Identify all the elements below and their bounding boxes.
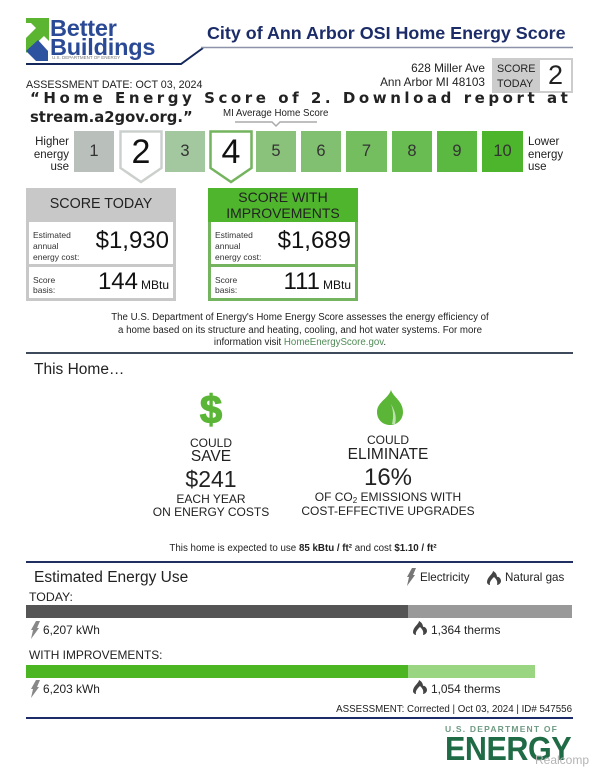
marker: score today 2 <box>119 130 163 184</box>
score 10 <box>482 131 523 172</box>
description text <box>111 312 489 348</box>
score 5: 5 <box>271 142 281 160</box>
energy wordmark: ENERGY <box>445 730 571 767</box>
badge value <box>540 60 571 91</box>
score 8 <box>392 131 432 172</box>
score 3 <box>165 131 205 172</box>
score 6: 6 <box>316 142 326 160</box>
logo: Better Buildings <box>26 15 155 61</box>
basis row <box>215 268 351 295</box>
lower energy use <box>528 136 564 173</box>
department line: U.S. DEPARTMENT OF <box>445 724 558 734</box>
address: 628 Miller Ave <box>411 61 485 75</box>
score 1: 1 <box>89 142 99 160</box>
score today badge <box>492 58 573 93</box>
panel heading: SCORE TODAY <box>50 196 152 212</box>
today electricity value <box>31 621 100 639</box>
score 7 <box>346 131 387 172</box>
cost label <box>33 230 79 262</box>
today label: TODAY: <box>29 590 73 604</box>
marker value 2: 2 <box>132 133 150 171</box>
basis label: basis: <box>215 285 237 295</box>
divider <box>26 352 573 354</box>
marker value 4: 4 <box>222 133 240 171</box>
panel heading <box>26 188 176 222</box>
eliminate: ELIMINATE <box>348 446 428 463</box>
header rule <box>26 46 573 65</box>
watermark: Realcomp <box>535 753 589 767</box>
basis label: Score <box>215 274 237 284</box>
address: Ann Arbor MI 48103 <box>380 75 485 89</box>
logo wordmark: Buildings <box>50 34 155 60</box>
could: COULD <box>367 433 409 447</box>
cost label: energy cost: <box>33 252 79 262</box>
logo subtext: U.S. DEPARTMENT OF ENERGY <box>52 55 120 60</box>
with improvements label: WITH IMPROVEMENTS: <box>29 648 162 662</box>
badge value: 2 <box>548 60 563 90</box>
higher energy use: use <box>50 161 69 173</box>
higher energy use: Higher <box>35 136 69 148</box>
lower energy use: energy <box>528 148 563 160</box>
heading: this home: This Home… <box>34 360 124 378</box>
savings caption: ON ENERGY COSTS <box>153 504 269 518</box>
basis label: basis: <box>33 285 55 295</box>
panel heading: IMPROVEMENTS <box>226 204 340 220</box>
basis value: 111MBtu <box>284 268 351 295</box>
quote line 2: stream.a2gov.org.” <box>30 109 193 126</box>
today electricity value: 6,207 kWh <box>43 622 100 636</box>
natural gas label: Natural gas <box>505 571 564 584</box>
emissions caption <box>301 490 475 518</box>
improved gas value: 1,054 therms <box>431 682 500 696</box>
divider <box>26 561 573 563</box>
badge label: SCORE <box>497 63 535 75</box>
save: SAVE <box>191 448 231 465</box>
intensity note: This home is expected to use 85 kBtu / ft² and cost $1.10 / ft² <box>169 543 437 554</box>
emissions callout <box>301 433 475 518</box>
electricity label: Electricity <box>420 571 470 584</box>
logo wordmark <box>50 15 155 60</box>
badge label: TODAY <box>497 78 533 90</box>
cost label <box>215 230 261 262</box>
logo: U.S. Department of Energy <box>445 724 572 767</box>
score scale <box>74 131 523 172</box>
description text: information visit HomeEnergyScore.gov. <box>214 337 386 348</box>
amount: $241 <box>185 466 237 492</box>
score 3: 3 <box>180 142 190 160</box>
cost label: energy cost: <box>215 252 261 262</box>
electricity segment <box>26 665 408 678</box>
cost value: $1,930 <box>96 227 169 254</box>
improved electricity value <box>31 680 100 698</box>
panel heading: SCORE WITH <box>238 188 328 204</box>
cost label: Estimated <box>33 230 71 240</box>
emissions caption: COST-EFFECTIVE UPGRADES <box>301 504 475 518</box>
score 5 <box>256 131 296 172</box>
divider <box>26 717 573 719</box>
savings caption <box>153 492 269 518</box>
quote line 1: “Home Energy Score of 2. Download report at <box>30 89 571 107</box>
today gas value: 1,364 therms <box>431 622 500 636</box>
lower energy use: use <box>528 161 547 173</box>
icon: dollar: $ <box>200 388 222 432</box>
could: COULD <box>190 436 232 450</box>
higher energy use <box>34 136 69 173</box>
basis value: 144MBtu <box>98 268 169 295</box>
score 10: 10 <box>493 142 512 160</box>
cost value: $1,689 <box>278 227 351 254</box>
savings caption: EACH YEAR <box>176 492 246 506</box>
panel heading <box>208 188 358 222</box>
basis label <box>215 274 237 295</box>
assessment footer: ASSESSMENT: Corrected | Oct 03, 2024 | ID# 547556 <box>336 704 572 715</box>
heading: estimated energy use: Estimated Energy Use <box>34 568 188 586</box>
higher energy use: energy <box>34 148 69 160</box>
title: City of Ann Arbor OSI Home Energy Score <box>207 22 566 42</box>
cost row <box>211 222 355 267</box>
electricity segment <box>26 605 408 618</box>
panel: score with improvements <box>208 188 358 301</box>
badge label <box>497 63 535 90</box>
cost label: annual <box>33 240 59 250</box>
score 6 <box>301 131 341 172</box>
score 9 <box>437 131 477 172</box>
score 8: 8 <box>407 142 417 160</box>
today bar <box>26 605 572 618</box>
cost row <box>29 222 173 267</box>
MI average label: MI Average Home Score <box>223 108 328 119</box>
logo mark <box>26 18 49 61</box>
MI average bracket <box>235 121 317 127</box>
basis row <box>33 268 169 295</box>
icon: gas flame <box>487 571 501 585</box>
improved electricity value: 6,203 kWh <box>43 682 100 696</box>
basis label: Score <box>33 274 55 284</box>
address <box>380 61 485 89</box>
cost label: Estimated <box>215 230 253 240</box>
savings callout <box>153 436 269 518</box>
lower energy use: Lower <box>528 136 559 148</box>
panel: score today <box>26 188 176 301</box>
description text: a home based on its structure and heating, cooling, and hot water systems. For more <box>118 324 482 336</box>
improvements bar <box>26 665 535 678</box>
icon: electricity <box>407 568 416 586</box>
score 1 <box>74 131 114 172</box>
emissions caption: OF CO2 EMISSIONS WITH <box>315 490 461 505</box>
legend <box>407 568 564 586</box>
logo wordmark: Better <box>50 15 117 41</box>
assessment date: ASSESSMENT DATE: OCT 03, 2024 <box>26 79 202 91</box>
cost label: annual <box>215 240 241 250</box>
marker: improved score 4 <box>209 130 253 184</box>
score 7: 7 <box>362 142 371 160</box>
basis label <box>33 274 55 295</box>
percentage: 16% <box>364 464 412 490</box>
icon: leaf <box>377 390 403 425</box>
description text: The U.S. Department of Energy's Home Energy Score assesses the energy efficiency of <box>111 312 489 323</box>
score 9: 9 <box>452 142 462 160</box>
